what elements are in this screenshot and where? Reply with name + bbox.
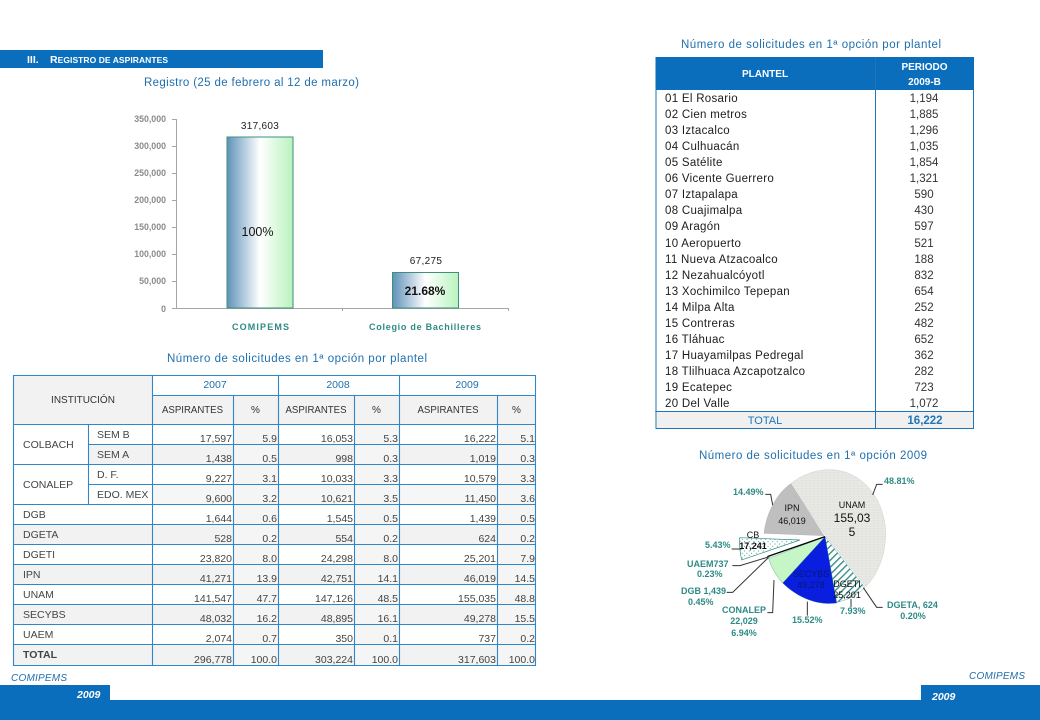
- bar chart: registro: 300,000: [134, 141, 166, 151]
- 2008 values: 3.5: [383, 493, 398, 505]
- 2008 values: 8.0: [383, 553, 398, 565]
- 2008 values: 10,621: [321, 493, 353, 505]
- 2009 values: 7.9: [520, 553, 535, 565]
- row labels: D. F.: [97, 469, 119, 481]
- outside labels: 0.45%: [688, 597, 714, 607]
- plantel names: 19 Ecatepec: [665, 382, 732, 394]
- plantel names: 11 Nueva Atzacoalco: [665, 254, 778, 266]
- plantel values: 597: [914, 221, 934, 233]
- row labels: SECYBS: [23, 609, 66, 621]
- plantel names: 17 Huayamilpas Pedregal: [665, 350, 804, 362]
- table: plantel: PERIODO: [901, 62, 948, 73]
- outside labels: 14.49%: [733, 487, 764, 497]
- 2009 values: 46,019: [464, 573, 496, 585]
- row labels: SEM B: [97, 429, 130, 441]
- 2008 values: 0.2: [383, 533, 398, 545]
- 2009 values: 16,222: [464, 433, 496, 445]
- 2008 values: 0.1: [383, 633, 398, 645]
- outside labels: CONALEP: [722, 605, 766, 615]
- 2009 values: 317,603: [458, 654, 496, 666]
- table: institucion: ASPIRANTES: [286, 405, 347, 416]
- table: institucion: INSTITUCIÓN: [51, 393, 115, 406]
- plantel names: 14 Milpa Alta: [665, 302, 735, 314]
- bar chart: registro: Colegio de Bachilleres: [369, 322, 481, 332]
- 2007 values: 141,547: [194, 593, 232, 605]
- inside labels: 155,03: [834, 511, 871, 525]
- heading: pie: Número de solicitudes en 1ª opción 2009: [699, 450, 927, 462]
- plantel values: 430: [914, 205, 934, 217]
- heading: tabla plantel: Número de solicitudes en 1ª opción por plantel: [681, 39, 941, 51]
- bar chart: registro: 100%: [242, 225, 273, 239]
- inside labels: SECYBS: [793, 569, 829, 579]
- row labels: IPN: [23, 569, 41, 581]
- 2009 values: 0.3: [520, 453, 535, 465]
- 2008 values: 147,126: [315, 593, 353, 605]
- 2007 values: 1,644: [206, 513, 232, 525]
- 2007 values: 9,227: [206, 473, 232, 485]
- plantel values: 1,194: [910, 93, 939, 105]
- plantel names: 08 Cuajimalpa: [665, 205, 743, 217]
- plantel values: 1,854: [910, 157, 939, 169]
- row labels: DGB: [23, 509, 46, 521]
- plantel names: 02 Cien metros: [665, 109, 747, 121]
- plantel names: 13 Xochimilco Tepepan: [665, 286, 790, 298]
- outside labels: 7.93%: [840, 606, 866, 616]
- 2009 values: 14.5: [515, 573, 535, 585]
- 2009 values: 0.2: [520, 533, 535, 545]
- plantel names: 12 Nezahualcóyotl: [665, 270, 765, 282]
- footer band: 2009: [76, 689, 101, 701]
- table: institucion: 2009: [455, 379, 479, 391]
- outside labels: 15.52%: [792, 615, 823, 625]
- bar chart: registro: 150,000: [134, 222, 166, 232]
- bar chart: registro: 200,000: [134, 195, 166, 205]
- outside labels: [681, 476, 938, 638]
- table: institucion: %: [251, 405, 260, 416]
- pie chart: [681, 470, 938, 638]
- plantel values: 1,296: [910, 125, 938, 137]
- row labels: CONALEP: [23, 479, 73, 491]
- bar chart: registro: 100,000: [134, 249, 166, 259]
- 2008 values: 48.5: [378, 593, 398, 605]
- 2008 values: 5.3: [383, 433, 398, 445]
- 2009 values: 11,450: [465, 493, 496, 505]
- 2007 values: 23,820: [200, 553, 232, 565]
- bar chart: registro: 250,000: [134, 168, 166, 178]
- 2009 values: 100.0: [509, 654, 535, 666]
- 2008 values: 1,545: [327, 513, 353, 525]
- 2009 values: 49,278: [464, 613, 496, 625]
- inside labels: 49,278: [797, 580, 825, 590]
- 2009 values: 155,035: [458, 593, 496, 605]
- table: plantel: PLANTEL: [742, 69, 788, 80]
- inside labels: IPN: [784, 503, 800, 513]
- 2008 values: 48,895: [321, 613, 353, 625]
- inside labels: 25,201: [833, 590, 861, 600]
- 2008 values: 100.0: [372, 654, 398, 666]
- bar chart: registro: 21.68%: [405, 284, 446, 298]
- plantel names: 07 Iztapalapa: [665, 189, 738, 201]
- plantel names: 20 Del Valle: [665, 398, 730, 410]
- 2009 values: 1,019: [470, 453, 496, 465]
- table: institucion: %: [512, 405, 521, 416]
- 2007 values: 296,778: [194, 654, 232, 666]
- 2007 values: 528: [214, 533, 232, 545]
- row labels: UAEM: [23, 629, 53, 641]
- 2007 values: 47.7: [257, 593, 277, 605]
- 2007 values: 5.9: [262, 433, 277, 445]
- 2008 values: [315, 433, 398, 666]
- 2007 values: 41,271: [200, 573, 232, 585]
- plantel names: 16 Tláhuac: [665, 334, 725, 346]
- inside labels: 17,241: [739, 541, 767, 551]
- 2008 values: 350: [335, 633, 353, 645]
- outside labels: 6.94%: [731, 628, 757, 638]
- 2008 values: 10,033: [321, 473, 353, 485]
- 2007 values: 48,032: [200, 613, 232, 625]
- row labels: UNAM: [23, 589, 54, 601]
- outside labels: 5.43%: [705, 540, 731, 550]
- pie slices: [727, 470, 886, 616]
- table: plantel: 2009-B: [908, 77, 941, 88]
- inside labels: UNAM: [839, 500, 865, 510]
- 2007 values: 2,074: [206, 633, 232, 645]
- section header bar: III.: [27, 54, 39, 66]
- table: institucion: ASPIRANTES: [418, 405, 479, 416]
- row labels: SEM A: [97, 449, 129, 461]
- plantel names: [665, 93, 805, 410]
- table: plantel: [656, 57, 974, 428]
- 2007 values: 0.6: [262, 513, 277, 525]
- inside labels: [739, 500, 871, 600]
- plantel names: 18 Tlilhuaca Azcapotzalco: [665, 366, 805, 378]
- heading: registro: Registro (25 de febrero al 12 de marzo): [144, 77, 359, 89]
- bar chart: registro: COMIPEMS: [232, 322, 289, 332]
- plantel values: 362: [914, 350, 934, 362]
- 2007 values: 3.1: [262, 473, 277, 485]
- table: plantel: 16,222: [907, 415, 943, 427]
- plantel names: 01 El Rosario: [665, 93, 738, 105]
- footer band: [0, 685, 1040, 720]
- plantel names: 09 Aragón: [665, 221, 720, 233]
- section header bar: [0, 50, 323, 68]
- section header bar: REGISTRO DE ASPIRANTES: [50, 54, 168, 66]
- 2007 values: 100.0: [251, 654, 277, 666]
- bar chart: registro: [134, 114, 508, 332]
- inside labels: DGETI: [833, 579, 861, 589]
- 2009 values: 0.2: [520, 633, 535, 645]
- plantel values: [910, 93, 939, 410]
- 2008 values: 24,298: [321, 553, 353, 565]
- row labels: [23, 429, 148, 661]
- table: plantel: TOTAL: [748, 415, 782, 427]
- table: institucion: %: [372, 405, 381, 416]
- plantel names: 15 Contreras: [665, 318, 735, 330]
- 2009 values: 5.1: [520, 433, 535, 445]
- table: institucion: [13, 375, 536, 666]
- 2007 values: 1,438: [206, 453, 232, 465]
- outside labels: DGB 1,439: [681, 586, 726, 596]
- 2009 values: 25,201: [464, 553, 496, 565]
- inside labels: 5: [849, 525, 856, 539]
- outside labels: DGETA, 624: [887, 600, 938, 610]
- row labels: DGETA: [23, 529, 58, 541]
- 2007 values: 3.2: [262, 493, 277, 505]
- row labels: COLBACH: [23, 439, 74, 451]
- 2007 values: 16.2: [257, 613, 277, 625]
- 2009 values: 48.8: [515, 593, 535, 605]
- plantel values: 252: [914, 302, 934, 314]
- 2007 values: 0.7: [262, 633, 277, 645]
- bar chart: registro: 350,000: [134, 114, 166, 124]
- 2008 values: 0.3: [383, 453, 398, 465]
- plantel names: 06 Vicente Guerrero: [665, 173, 774, 185]
- 2009 values: 624: [478, 533, 496, 545]
- table: institucion: ASPIRANTES: [162, 405, 223, 416]
- 2009 values: [458, 433, 535, 666]
- footer label left: COMIPEMS: [11, 673, 67, 684]
- plantel values: 1,072: [910, 398, 938, 410]
- plantel values: 652: [914, 334, 934, 346]
- 2009 values: 10,579: [464, 473, 496, 485]
- 2009 values: 1,439: [470, 513, 496, 525]
- table: institucion: 2008: [326, 379, 350, 391]
- 2009 values: 15.5: [515, 613, 535, 625]
- footer band: 2009: [931, 691, 956, 703]
- 2009 values: 737: [478, 633, 496, 645]
- plantel values: 654: [914, 286, 934, 298]
- row labels: EDO. MEX: [97, 489, 148, 501]
- 2008 values: 14.1: [378, 573, 398, 585]
- 2007 values: 13.9: [257, 573, 277, 585]
- 2008 values: 16.1: [378, 613, 398, 625]
- plantel values: 188: [914, 254, 934, 266]
- 2008 values: 16,053: [321, 433, 353, 445]
- 2007 values: [194, 433, 277, 666]
- 2009 values: 3.6: [520, 493, 535, 505]
- plantel values: 1,321: [910, 173, 938, 185]
- bar chart: registro: 0: [161, 304, 166, 314]
- plantel values: 832: [914, 270, 934, 282]
- 2008 values: 42,751: [321, 573, 353, 585]
- bar chart: registro: 67,275: [410, 256, 442, 267]
- 2008 values: 0.5: [383, 513, 398, 525]
- 2009 values: 3.3: [520, 473, 535, 485]
- bar chart: registro: 50,000: [139, 276, 166, 286]
- 2008 values: 554: [335, 533, 353, 545]
- plantel values: 482: [914, 318, 934, 330]
- plantel values: 1,035: [910, 141, 938, 153]
- plantel names: 05 Satélite: [665, 157, 723, 169]
- table: institucion: 2007: [203, 379, 227, 391]
- 2007 values: 0.5: [262, 453, 277, 465]
- plantel names: 10 Aeropuerto: [665, 238, 741, 250]
- outside labels: 22,029: [730, 616, 758, 626]
- outside labels: 48.81%: [884, 476, 915, 486]
- footer label right: COMIPEMS: [969, 671, 1025, 682]
- outside labels: 0.20%: [900, 611, 926, 621]
- heading: tabla institucion: Número de solicitudes en 1ª opción por plantel: [167, 353, 427, 365]
- bar chart: registro: 317,603: [241, 121, 279, 132]
- 2008 values: 3.3: [383, 473, 398, 485]
- inside labels: 46,019: [778, 516, 806, 526]
- plantel values: 723: [914, 382, 934, 394]
- outside labels: UAEM737: [687, 559, 729, 569]
- plantel names: 04 Culhuacán: [665, 141, 740, 153]
- 2007 values: 9,600: [206, 493, 232, 505]
- plantel values: 282: [914, 366, 934, 378]
- plantel values: 590: [914, 189, 934, 201]
- 2009 values: 0.5: [520, 513, 535, 525]
- inside labels: CB: [747, 530, 759, 540]
- 2007 values: 0.2: [262, 533, 277, 545]
- row labels: DGETI: [23, 549, 55, 561]
- 2007 values: 17,597: [200, 433, 232, 445]
- row labels: TOTAL: [23, 649, 58, 661]
- plantel values: 521: [914, 238, 934, 250]
- 2008 values: 303,224: [315, 654, 353, 666]
- plantel names: 03 Iztacalco: [665, 125, 730, 137]
- plantel values: 1,885: [910, 109, 938, 121]
- 2007 values: 8.0: [262, 553, 277, 565]
- outside labels: 0.23%: [697, 569, 723, 579]
- 2008 values: 998: [335, 453, 353, 465]
